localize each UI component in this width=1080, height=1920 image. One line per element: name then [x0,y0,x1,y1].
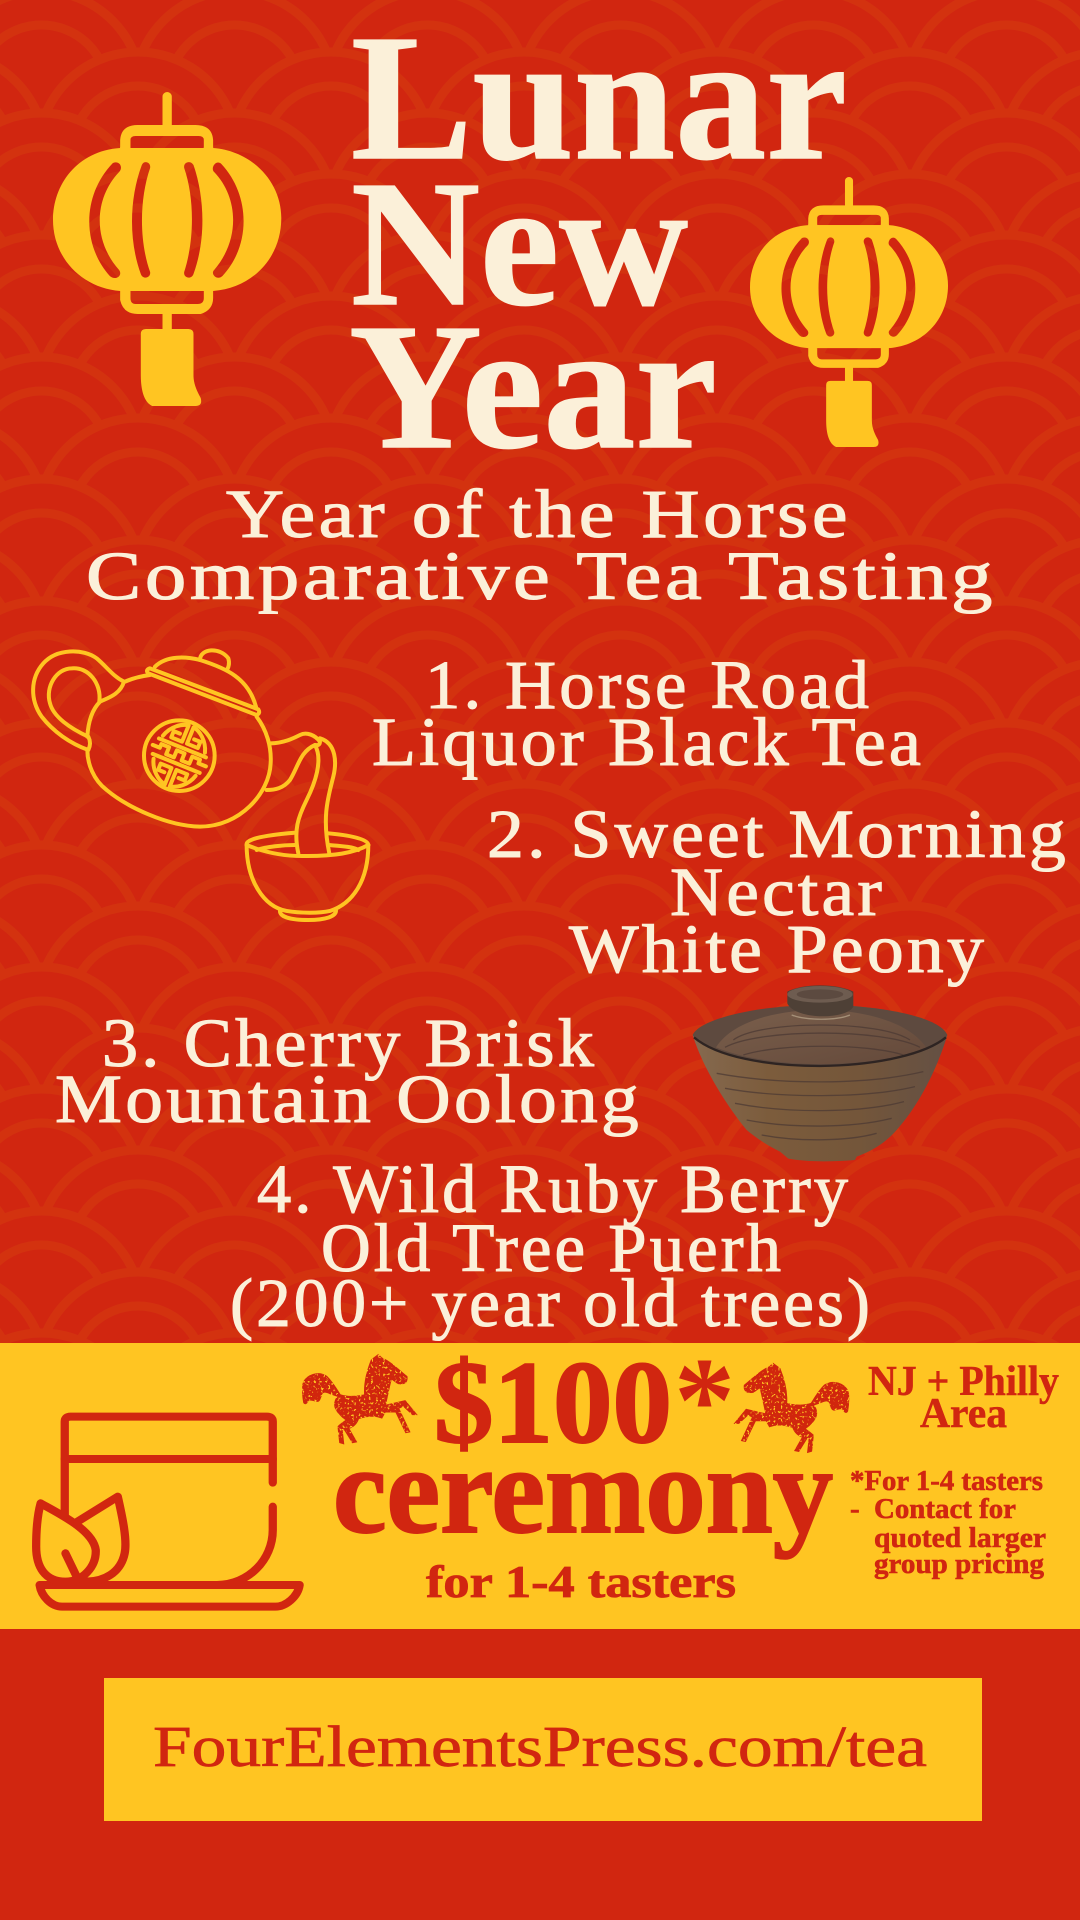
tasters note: for 1-4 tasters [426,1557,736,1607]
tea list item 4 [230,1151,873,1341]
tea list item 2: White Peony [569,911,987,987]
pricing footnote: Contact for [874,1493,1016,1525]
tea list item 4: (200+ year old trees) [230,1265,873,1341]
title: Year [349,287,717,486]
image: lidded ceramic bowl [693,985,947,1161]
tea list item 2: 2. Sweet Morning [487,796,1069,872]
tea list item 1: Liquor Black Tea [372,704,924,780]
pricing footnote: *For 1-4 tasters [850,1465,1043,1497]
title: New [351,144,688,343]
tea list item 3: Mountain Oolong [55,1061,642,1137]
icon: teapot pouring into cup [33,650,368,920]
tea list item 1 [372,647,924,780]
tea list item 4: 4. Wild Ruby Berry [257,1151,851,1227]
panel: pricing banner [0,1333,1080,1629]
subtitle: Comparative Tea Tasting [86,538,996,614]
website button: FourElementsPress.com/tea [153,1714,927,1779]
pricing footnote: - [850,1493,860,1525]
pricing footnote [850,1465,1046,1580]
subtitle: Year of the Horse [226,476,851,552]
title [349,0,847,486]
location: NJ + Philly [868,1359,1059,1405]
icon: left horse [303,1355,416,1443]
tea list item 2 [487,796,1069,987]
pricing footnote: quoted larger [874,1522,1046,1554]
icon: large lantern [53,92,281,406]
tea list item 1: 1. Horse Road [425,647,872,723]
ceremony heading: ceremony [333,1422,833,1559]
tea list item 3 [55,1005,642,1137]
title: Lunar [351,0,847,197]
pricing footnote: group pricing [874,1548,1045,1580]
tea list item 2: Nectar [670,854,885,930]
price: $100 [434,1337,672,1468]
website button [104,1678,982,1821]
icon: small lantern [750,177,948,447]
tea list item 4: Old Tree Puerh [321,1210,784,1286]
icon: tea cup with leaves [36,1417,300,1607]
price: * [674,1333,735,1468]
icon: right horse [735,1364,848,1452]
location: Area [920,1391,1007,1437]
subtitle [86,476,996,614]
tea list item 3: 3. Cherry Brisk [102,1005,597,1081]
location [868,1359,1059,1437]
